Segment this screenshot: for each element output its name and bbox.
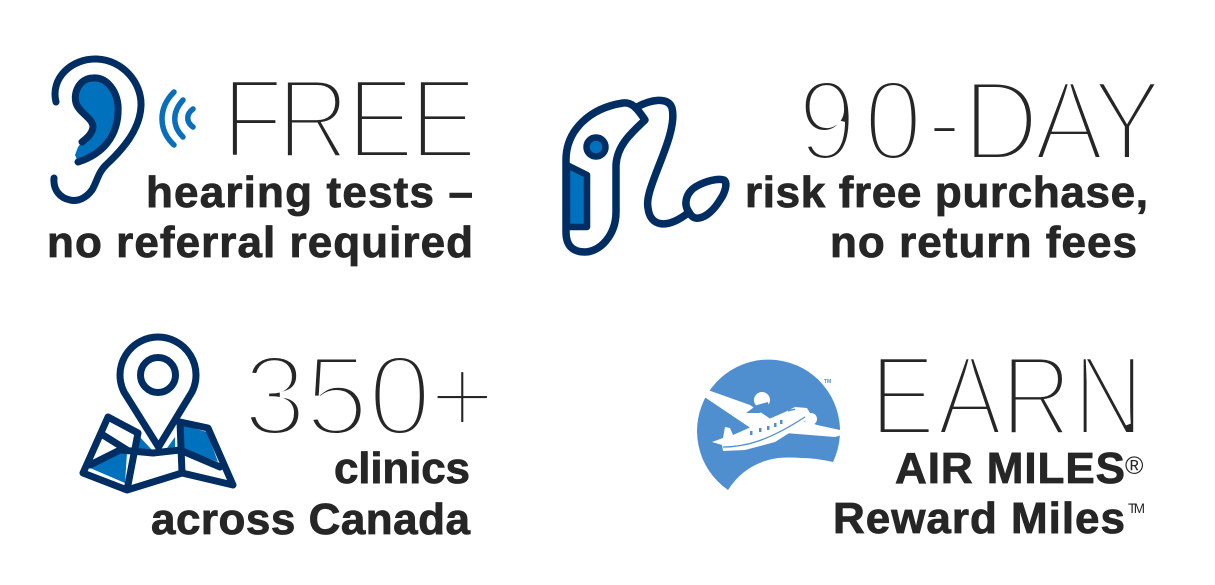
panel: 350+ clinics xyxy=(83,333,496,544)
heading: EARN: EARN xyxy=(870,332,1144,460)
panel: free hearing tests xyxy=(47,55,477,267)
heading: 90-DAY: 90-DAY xyxy=(798,58,1162,185)
text: no return fees: no return fees xyxy=(830,218,1137,267)
text: across Canada: across Canada xyxy=(151,495,471,544)
text: Reward Miles: Reward Miles xyxy=(833,494,1125,543)
panel: earn air miles xyxy=(697,332,1145,543)
panel: 90-day risk free xyxy=(566,58,1162,267)
text: risk free purchase: risk free purchase, xyxy=(745,168,1148,217)
trademark mark on logo: TM xyxy=(824,379,831,385)
text: no referral required: no referral required xyxy=(47,218,473,267)
icon: ear with sound waves xyxy=(54,59,193,201)
heading: 350+: 350+ xyxy=(243,333,496,460)
icon: map with location pin xyxy=(83,337,233,490)
heading: FREE: FREE xyxy=(222,55,477,182)
icon: air miles plane logo xyxy=(697,360,849,490)
registered mark: ® xyxy=(1125,452,1144,480)
icon: hearing aid xyxy=(566,100,726,252)
text: clinics: clinics xyxy=(334,444,470,493)
text: hearing tests: hearing tests – xyxy=(146,168,473,217)
trademark mark: TM xyxy=(1128,501,1145,516)
text: AIR MILES: AIR MILES xyxy=(895,444,1125,493)
